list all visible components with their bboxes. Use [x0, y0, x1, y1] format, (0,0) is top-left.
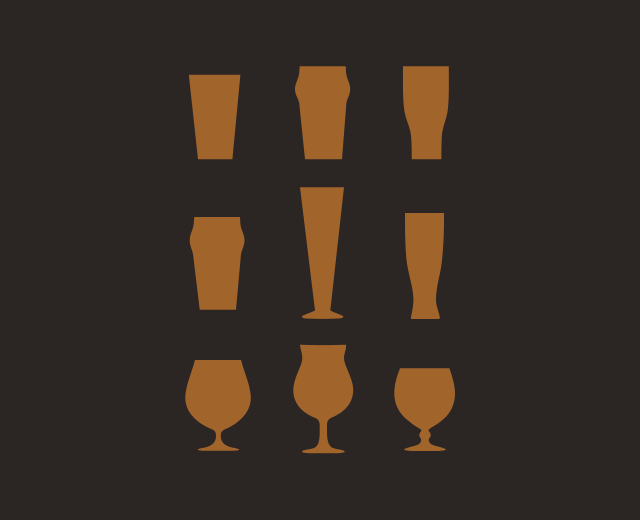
icon: goblet glass	[394, 368, 455, 451]
icon: imperial nonic pint glass	[190, 217, 244, 310]
icon: pilsner glass	[300, 187, 344, 319]
icon: snifter glass	[185, 360, 251, 451]
icon: weizen glass	[405, 213, 444, 319]
icon: tumbler pint glass	[403, 66, 449, 159]
icon: shaker pint glass	[189, 75, 240, 159]
icon: nonic pint glass	[295, 66, 350, 159]
icon: tulip glass	[293, 345, 353, 453]
